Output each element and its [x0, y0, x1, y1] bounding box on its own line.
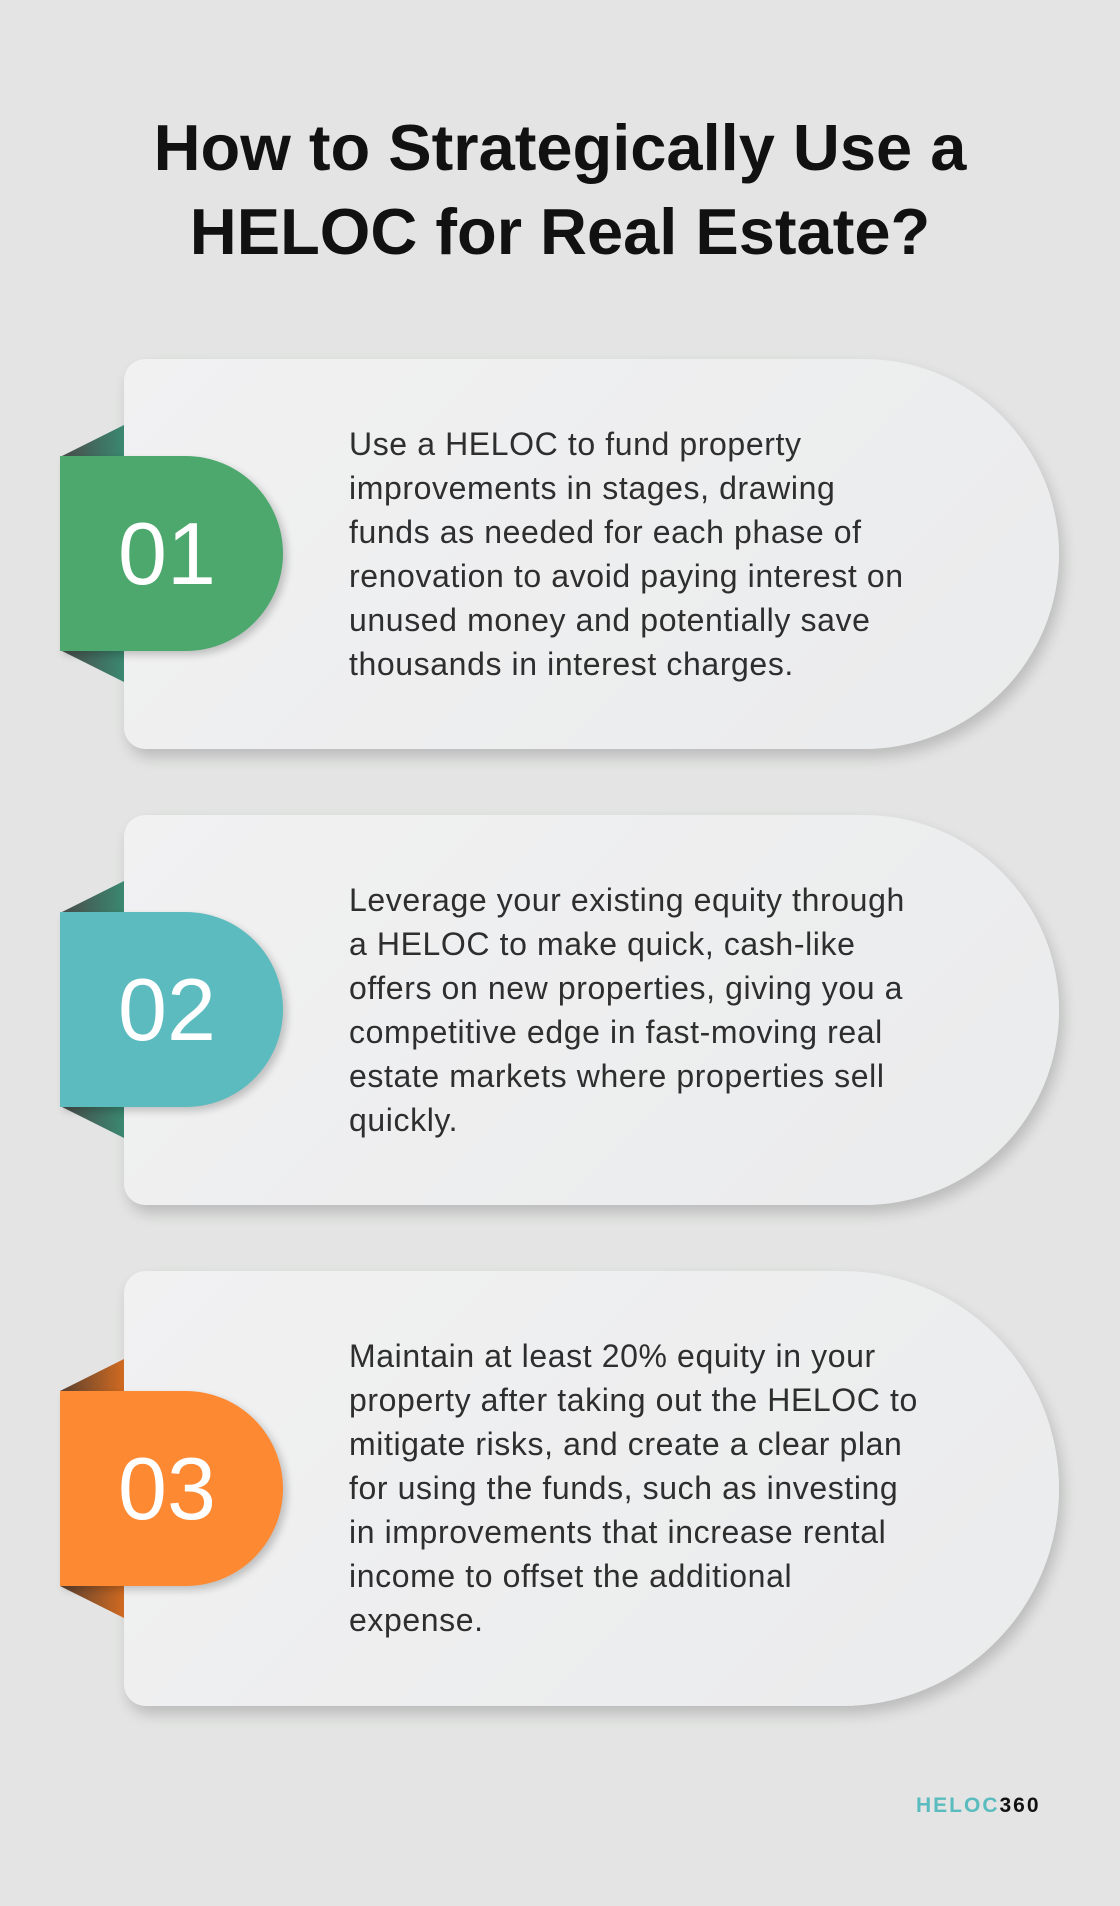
text 2: offers on new properties, giving you a [349, 970, 903, 1006]
text 2: competitive edge in fast-moving real [349, 1014, 883, 1050]
text 2: a HELOC to make quick, cash-like [349, 926, 856, 962]
text 1 [349, 426, 904, 682]
text 1: funds as needed for each phase of [349, 514, 862, 550]
title: How to Strategically Use a [154, 111, 966, 184]
text 1: thousands in interest charges. [349, 646, 794, 682]
text 1: improvements in stages, drawing [349, 470, 835, 506]
text 3: expense. [349, 1602, 484, 1638]
panel: step 3 [60, 1271, 1069, 1720]
fold top 3 [60, 1359, 124, 1391]
text 1: unused money and potentially save [349, 602, 870, 638]
text 1: renovation to avoid paying interest on [349, 558, 904, 594]
card 3 [124, 1271, 1059, 1706]
text 3: income to offset the additional [349, 1558, 792, 1594]
badge 02: 02 [118, 960, 216, 1059]
fold bottom 2 [62, 1107, 124, 1138]
badge 02 [60, 912, 283, 1107]
card 2 [124, 815, 1059, 1205]
text 2: Leverage your existing equity through [349, 882, 905, 918]
badge 01 [60, 456, 283, 651]
logo: HELOC360 [916, 1794, 1041, 1817]
text 1: Use a HELOC to fund property [349, 426, 802, 462]
text 3: Maintain at least 20% equity in your [349, 1338, 876, 1374]
fold top 2 [62, 881, 124, 912]
badge 03 [60, 1391, 283, 1586]
text 3: in improvements that increase rental [349, 1514, 886, 1550]
text 3: for using the funds, such as investing [349, 1470, 898, 1506]
fold bottom 3 [60, 1586, 124, 1618]
badge 01: 01 [118, 504, 216, 603]
title: HELOC for Real Estate? [190, 195, 930, 268]
panel: step 2 [60, 815, 1068, 1219]
text 2: quickly. [349, 1102, 458, 1138]
badge 03: 03 [118, 1439, 216, 1538]
fold bottom 1 [62, 651, 124, 682]
card 1 [124, 359, 1059, 749]
title [154, 111, 967, 268]
text 3: mitigate risks, and create a clear plan [349, 1426, 902, 1462]
text 2 [349, 882, 905, 1138]
panel: step 1 [60, 359, 1068, 763]
text 3 [349, 1338, 918, 1638]
text 3: property after taking out the HELOC to [349, 1382, 918, 1418]
fold top 1 [62, 425, 124, 456]
text 2: estate markets where properties sell [349, 1058, 885, 1094]
